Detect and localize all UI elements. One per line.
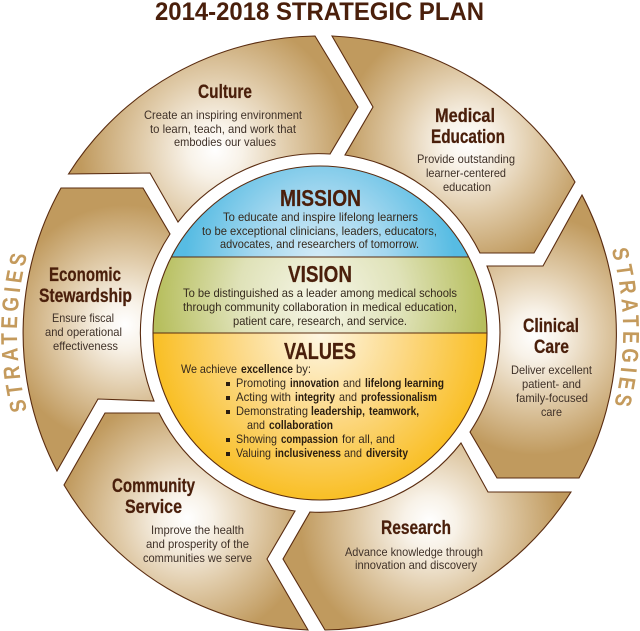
value: leadership, teamwork, and collaboration [226,404,419,432]
segment: economic stewardship: Stewardship [39,286,132,307]
mission panel: MISSION [280,185,361,211]
value: integrity and professionalism: professionalism [361,390,437,404]
values panel: excellence [241,362,293,376]
segment: research [283,443,571,630]
value: integrity and professionalism: integrity [295,390,335,404]
segment: economic stewardship: Ensure fiscal [52,311,114,325]
value: compassion: compassion [281,432,338,446]
value: leadership, teamwork, and collaboration: leadership, [311,404,365,418]
values panel: VALUES [284,338,356,364]
segment: medical education: Provide outstanding [417,152,515,166]
center circle [150,160,490,503]
segment: economic stewardship: and operational [45,325,122,339]
value: inclusiveness and diversity: and [344,446,362,460]
segment: community service: communities we serve [143,551,252,565]
value: compassion [226,432,395,446]
value: leadership, teamwork, and collaboration: and [247,418,265,432]
vision panel: VISION [288,261,352,287]
value: leadership, teamwork, and collaboration: teamwork, [369,404,419,418]
value: innovation and lifelong learning [226,376,444,390]
segment: community service: Improve the health [151,523,244,537]
segment: community service: Community [112,476,195,497]
mission panel: to be exceptional clinicians, leaders, educators, [202,224,437,238]
value: leadership, teamwork, and collaboration: collaboration [269,418,333,432]
segment: clinical care: patient- and [522,377,581,391]
value: integrity and professionalism [226,390,437,404]
value: inclusiveness and diversity: Valuing [236,446,271,460]
value: innovation and lifelong learning: Promoting [236,376,286,390]
mission panel [172,166,468,256]
vision panel: patient care, research, and service. [233,314,407,328]
value: integrity and professionalism: Acting with [236,390,291,404]
segment: medical education: Education [431,127,505,148]
segment: clinical care: care [541,405,562,419]
segment: medical education: Medical [435,106,495,127]
segment: community service: Service [125,497,182,518]
segment: culture: embodies our values [174,135,276,149]
value: compassion: Showing [236,432,277,446]
segment: clinical care: Deliver excellent [511,363,593,377]
mission panel: advocates, and researchers of tomorrow. [220,237,419,251]
segment: economic stewardship [23,188,170,471]
value: innovation and lifelong learning: and [343,376,361,390]
segment: clinical care: Clinical [523,316,579,337]
value: leadership, teamwork, and collaboration: Demonstrating [236,404,308,418]
vision panel: To be distinguished as a leader among medical schools [183,286,457,300]
value: inclusiveness and diversity [226,446,408,460]
segment: economic stewardship: effectiveness [53,339,118,353]
segment: clinical care [470,195,616,478]
value: integrity and professionalism: and [339,390,357,404]
segment: culture: to learn, teach, and work that [150,122,297,136]
segment: research: Research [381,518,451,539]
value: innovation and lifelong learning: innovation [290,376,339,390]
segment: culture: Culture [198,82,252,103]
segment: medical education [332,36,575,253]
segment: economic stewardship: Economic [49,265,121,286]
values panel: by: [296,362,311,376]
vision panel [150,257,490,333]
values panel [150,333,490,503]
segment: medical education: learner-centered [426,166,506,180]
segment: clinical care: family-focused [516,391,588,405]
vision panel: through community collaboration in medical education, [183,300,457,314]
segment: culture: Create an inspiring environment [144,108,303,122]
value: inclusiveness and diversity: diversity [366,446,408,460]
segment: community service [64,413,308,630]
segment: culture [68,36,358,222]
segment: research: innovation and discovery [355,558,477,572]
segment: medical education: education [443,180,491,194]
value: inclusiveness and diversity: inclusiveness [275,446,341,460]
segment: clinical care: Care [534,337,569,358]
mission panel: To educate and inspire lifelong learners [223,210,418,224]
segment: research: Advance knowledge through [345,545,483,559]
values panel: We achieve [181,362,237,376]
segment: community service: and prosperity of the [146,537,249,551]
value: compassion: for all, and [342,432,395,446]
value: innovation and lifelong learning: lifelong learning [365,376,444,390]
